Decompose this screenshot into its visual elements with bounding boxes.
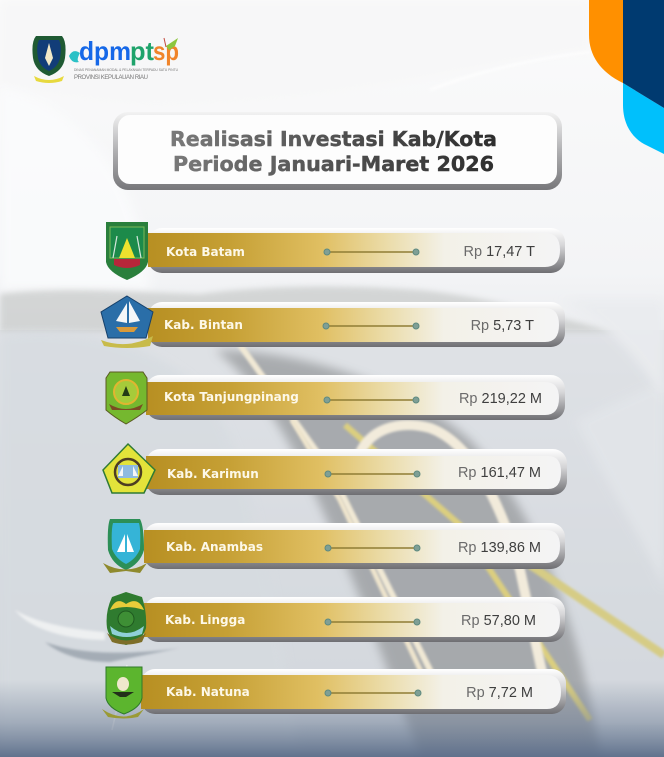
row: Kab. Anambas: [103, 519, 565, 573]
icon: Natuna crest: [102, 667, 144, 718]
icon: Bintan crest: [101, 296, 153, 348]
title panel: [113, 112, 562, 190]
connector: [325, 690, 421, 696]
icon: Anambas crest: [103, 519, 147, 573]
logo: DPMPTSP Kepri: [32, 36, 179, 83]
heading: Realisasi Investasi Kab/Kota: [170, 127, 497, 151]
logo wordmark: DINAS PENANAMAN MODAL & PELAYANAN TERPADU SATU PINTU: [74, 68, 179, 72]
logo wordmark: PROVINSI KEPULAUAN RIAU: [74, 75, 148, 81]
connector: [325, 545, 420, 551]
row: Kab. Natuna: [102, 667, 566, 718]
row: Kota Tanjungpinang: Rp 219,22 M: [459, 391, 542, 407]
logo wordmark: sp: [153, 36, 179, 66]
connector: [325, 619, 420, 625]
row: Kab. Bintan: Rp 5,73 T: [471, 318, 534, 334]
connector: [324, 397, 419, 403]
icon: Batam crest: [106, 222, 148, 280]
background photo: bridge and sea: [0, 287, 664, 757]
row: Kab. Lingga: Kab. Lingga: [165, 613, 245, 627]
row: Kab. Lingga: [107, 592, 565, 645]
row: Kota Batam: Kota Batam: [166, 245, 245, 259]
connector: [323, 323, 419, 329]
icon: provincial crest: [32, 36, 66, 83]
row: Kota Batam: [106, 222, 565, 280]
row: Kab. Bintan: Kab. Bintan: [164, 318, 243, 332]
row: Kab. Karimun: Rp 161,47 M: [458, 465, 541, 481]
logo wordmark: [69, 36, 179, 81]
icon: Karimun crest: [103, 444, 155, 493]
row: Kab. Bintan: [101, 296, 565, 348]
connector: [324, 249, 419, 255]
bottom dark fade: [0, 680, 664, 757]
row: Kab. Lingga: Rp 57,80 M: [461, 613, 536, 629]
icon: Lingga crest: [107, 592, 146, 645]
icon: Tanjungpinang crest: [106, 372, 147, 424]
row: Kota Tanjungpinang: Kota Tanjungpinang: [164, 390, 299, 404]
logo wordmark: pt: [130, 36, 154, 66]
logo wordmark: dpm: [79, 36, 131, 66]
row: Kab. Anambas: Rp 139,86 M: [458, 540, 541, 556]
top right corner shapes: [589, 0, 664, 154]
connector: [325, 471, 420, 477]
row: Kab. Karimun: Kab. Karimun: [167, 467, 259, 481]
row: Kab. Natuna: Rp 7,72 M: [466, 685, 533, 701]
row: Kota Batam: Rp 17,47 T: [464, 244, 535, 260]
row: Kab. Natuna: Kab. Natuna: [166, 685, 250, 699]
row: Kota Tanjungpinang: [106, 372, 565, 424]
row: Kab. Karimun: [103, 444, 567, 495]
row: Kab. Anambas: Kab. Anambas: [166, 540, 263, 554]
title panel: Periode Januari-Maret 2026: [173, 152, 494, 176]
